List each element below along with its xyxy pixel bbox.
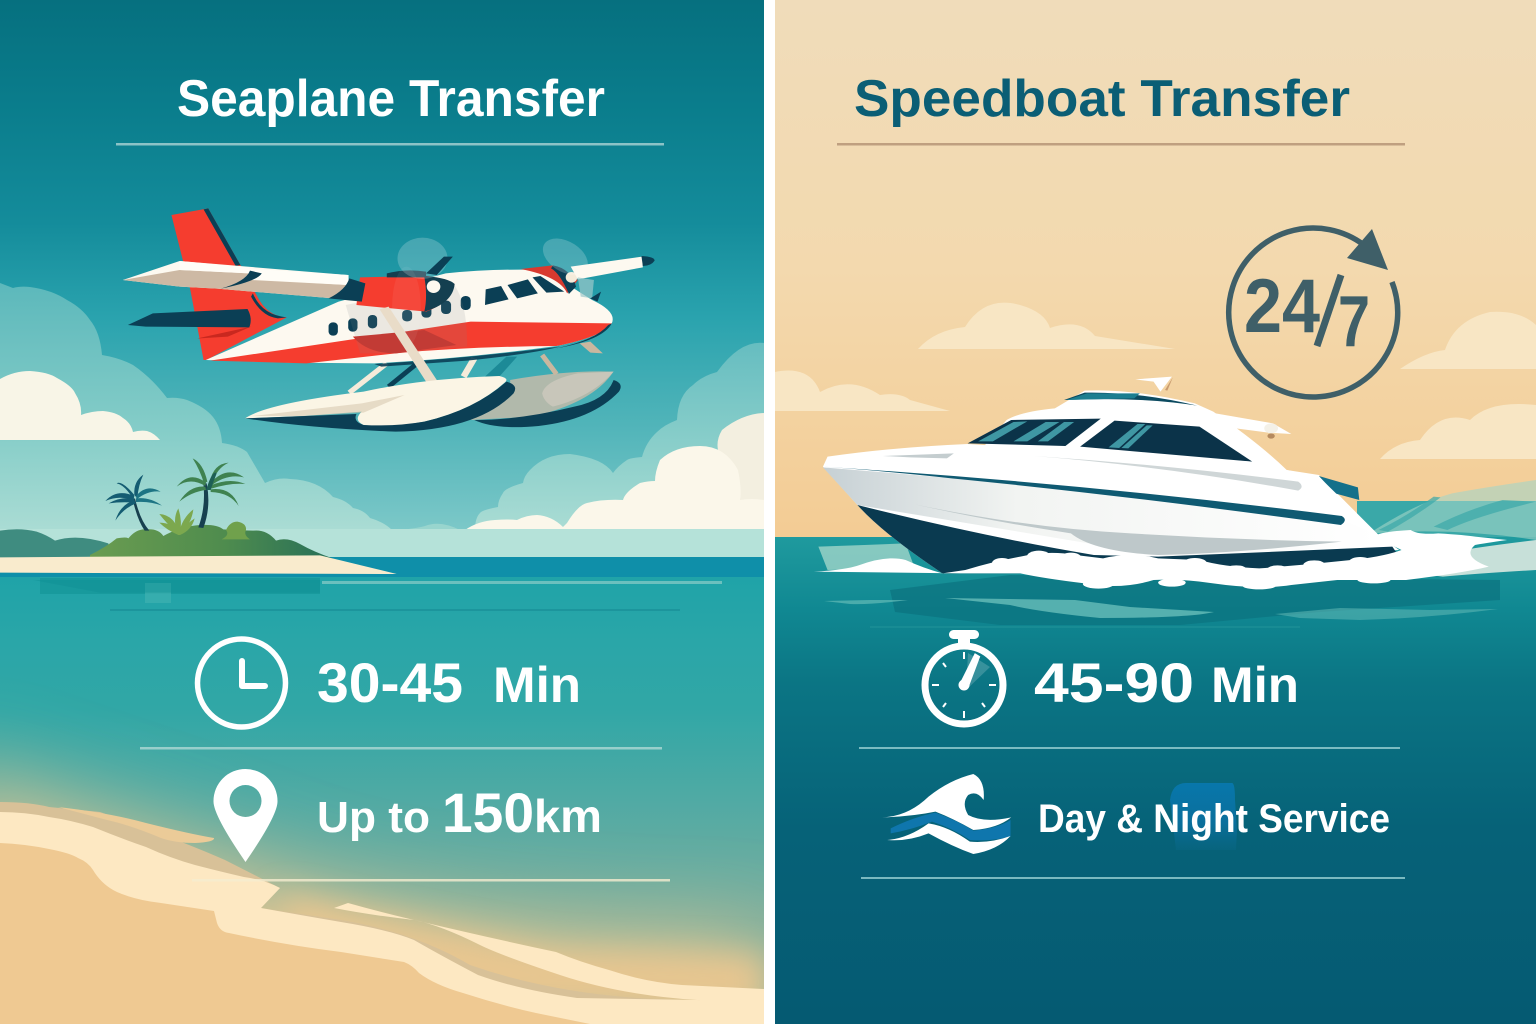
sea	[0, 557, 764, 1024]
divider	[859, 747, 1400, 749]
wing strut	[380, 307, 438, 383]
icon: map pin	[213, 769, 278, 862]
back cloud right	[475, 343, 764, 530]
palm tree left	[105, 475, 162, 531]
stat: distance	[213, 769, 602, 862]
sand finger	[58, 807, 214, 843]
dry sand base	[0, 843, 590, 1024]
stat: duration: Min	[493, 657, 581, 713]
sea	[775, 537, 1536, 1024]
fuselage	[206, 270, 613, 363]
flybridge	[1135, 377, 1172, 392]
icon: seaplane	[123, 208, 655, 432]
dark lower hull	[857, 505, 1399, 573]
stat: distance: 150	[442, 781, 534, 844]
pale sand strip	[0, 812, 764, 1024]
panel: seaplane transfer	[0, 0, 764, 1024]
gutter	[764, 0, 775, 1024]
divider	[192, 879, 670, 882]
sand base layers	[0, 802, 764, 1024]
icon: speedboat	[814, 377, 1536, 589]
title: Speedboat Transfer	[854, 70, 1350, 128]
upper pale strip	[334, 903, 764, 1010]
duration text: 45-90	[1034, 651, 1194, 714]
title underline	[837, 143, 1405, 146]
sea shadow under boat	[890, 575, 1500, 625]
cream cloud right	[718, 413, 764, 500]
icon: 24/7: 7	[1338, 282, 1370, 362]
cream cloud left	[0, 371, 160, 440]
sand near shore	[280, 895, 764, 1010]
duration text: 30-45	[317, 651, 463, 714]
24/7 numerals: 24	[1244, 264, 1320, 349]
stat: duration	[198, 639, 581, 727]
float struts	[349, 355, 556, 393]
float front	[245, 376, 506, 426]
stat: duration: Min	[1211, 657, 1299, 713]
rear tailplane	[128, 309, 251, 327]
icon: clock	[198, 639, 286, 727]
shadow on fuselage	[346, 283, 467, 353]
divider	[140, 747, 662, 750]
sea glints	[40, 578, 722, 611]
near engine	[356, 276, 455, 312]
title underline	[116, 143, 664, 146]
palm tree right	[177, 458, 245, 528]
distance text: Up to	[317, 793, 430, 842]
tail fin	[171, 208, 287, 360]
sky background	[775, 0, 1536, 540]
wake water	[1357, 501, 1536, 545]
sea reflections	[824, 598, 1498, 620]
icon: stopwatch	[925, 630, 1003, 724]
title: Seaplane Transfer	[177, 70, 605, 128]
blue patch	[1170, 783, 1237, 850]
back cloud left	[0, 283, 392, 530]
windows	[968, 419, 1101, 446]
divider	[861, 877, 1405, 879]
panel: speedboat transfer	[775, 0, 1536, 1024]
stat: distance: km	[534, 790, 602, 842]
small cloud	[410, 524, 458, 529]
floats back	[471, 371, 614, 420]
pale haze band	[0, 529, 764, 558]
icon: 24/7	[1229, 228, 1398, 397]
icon: tropical island	[0, 458, 397, 593]
sky background	[0, 0, 764, 560]
wash foam	[814, 530, 1507, 589]
wake spray	[1369, 480, 1536, 540]
hull stripe	[822, 467, 1345, 525]
deck and hull	[823, 444, 1399, 573]
clouds	[775, 303, 1536, 459]
bushes	[159, 508, 195, 535]
cabin	[984, 390, 1379, 535]
nose underside	[556, 323, 612, 348]
stat: service	[882, 774, 1390, 854]
service text: Day & Night Service	[1038, 797, 1390, 841]
stat: duration	[925, 630, 1299, 724]
windows	[329, 276, 564, 336]
sandy shallows blur	[0, 770, 764, 1024]
red stripe	[210, 322, 612, 363]
icon: wave	[882, 774, 1011, 854]
wet sand strip	[0, 802, 586, 994]
far engine	[521, 265, 578, 293]
wing	[123, 261, 349, 298]
